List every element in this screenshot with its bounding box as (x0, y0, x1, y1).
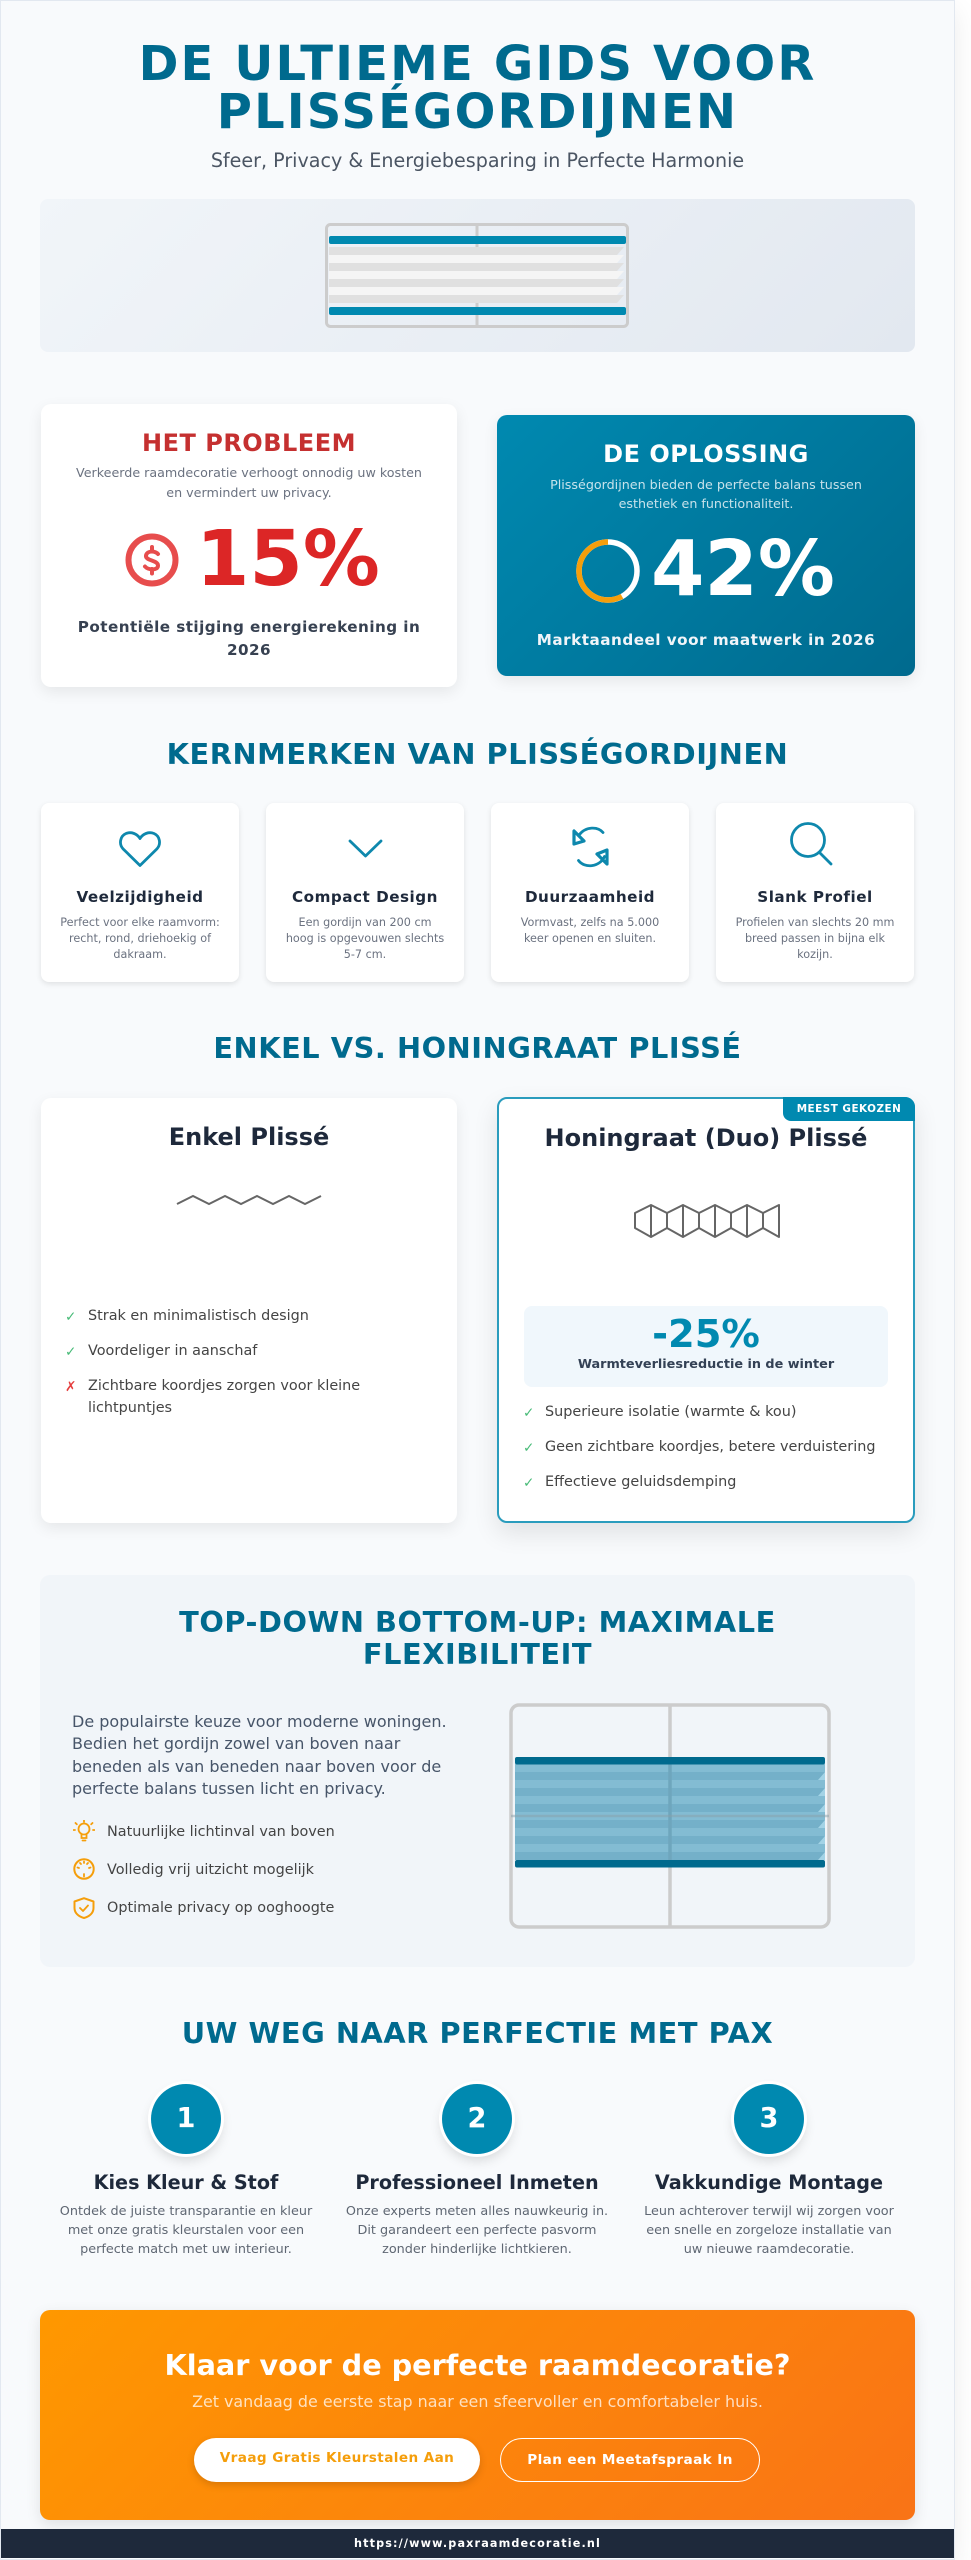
heading (179, 1605, 776, 1671)
button: meetafspraak: Plan een Meetafspraak In (527, 2452, 733, 2468)
panel: top-down bottom-up (40, 1575, 915, 1967)
step 1 (60, 2084, 312, 2257)
description: breed passen in bijna elk (745, 932, 885, 945)
description: Vormvast, zelfs na 5.000 (521, 916, 659, 929)
text: Volledig vrij uitzicht mogelijk (107, 1862, 314, 1878)
heading: enkel vs honingraat: ENKEL VS. HONINGRAAT PLISSÉ (213, 1031, 742, 1065)
text: probleem beschrijving (76, 465, 422, 500)
panel: het probleem (41, 404, 457, 687)
badge: meest gekozen: MEEST GEKOZEN (797, 1103, 901, 1115)
text: beschrijving: De populairste keuze voor moderne woningen. (72, 1712, 447, 1731)
step description: perfecte match met uw interieur. (80, 2242, 292, 2257)
step description: zonder hinderlijke lichtkieren. (382, 2242, 572, 2257)
text: beschrijving: Bedien het gordijn zowel van boven naar (72, 1734, 400, 1753)
description: recht, rond, driehoekig of (69, 932, 211, 945)
list: enkel plissé (65, 1308, 360, 1416)
text: oplossing stat label: Marktaandeel voor maatwerk in 2026 (537, 631, 875, 649)
panel: stappen (60, 2084, 894, 2257)
step description: uw nieuwe raamdecoratie. (684, 2242, 854, 2257)
footer: https://www.paxraamdecoratie.nl (354, 2537, 601, 2550)
description: keer openen en sluiten. (524, 932, 656, 945)
heading: FLEXIBILITEIT (363, 1637, 592, 1671)
text: probleem stat label: Potentiële stijging energierekening in (78, 618, 420, 636)
text: probleem stat label (78, 618, 420, 659)
text: beschrijving: perfecte balans tussen licht en privacy. (72, 1779, 386, 1798)
number circle: 1 (177, 2103, 195, 2134)
cta text: Zet vandaag de eerste stap naar een sfeervoller en comfortabeler huis. (192, 2392, 763, 2411)
description (60, 916, 220, 961)
title: PLISSÉGORDIJNEN (217, 84, 738, 140)
icon: shield check (74, 1897, 94, 1919)
icon: light bulb (73, 1820, 95, 1842)
heading: uw weg naar perfectie: UW WEG NAAR PERFECTIE MET PAX (182, 2016, 773, 2050)
heading: TOP-DOWN BOTTOM-UP: MAXIMALE (179, 1605, 776, 1639)
footer (1, 2529, 954, 2558)
step title: Kies Kleur & Stof (94, 2171, 278, 2194)
icon: pleated blind in window frame (325, 223, 629, 328)
step description: Leun achterover terwijl wij zorgen voor (644, 2204, 894, 2219)
list: voordelen (73, 1820, 335, 1919)
text: oplossing beschrijving: Plisségordijnen bieden de perfecte balans tussen (550, 477, 862, 492)
icon: dollar coin (126, 534, 178, 586)
text: oplossing beschrijving (550, 477, 862, 511)
text: beschrijving (72, 1712, 447, 1798)
icon: sync arrows (572, 826, 609, 868)
text: oplossing beschrijving: esthetiek en functionaliteit. (619, 496, 793, 511)
button: kleurstalen: Vraag Gratis Kleurstalen Aan (220, 2450, 454, 2466)
stat label: Warmteverliesreductie in de winter (578, 1357, 834, 1372)
stat value: -25% (652, 1312, 760, 1357)
step description: een snelle en zorgeloze installatie van (646, 2223, 892, 2238)
list: enkel plissé: ✓ (65, 1344, 76, 1360)
description: dakraam. (113, 948, 167, 961)
title: Compact Design (292, 888, 438, 906)
icon: single pleat wave (176, 1194, 322, 1206)
list: honingraat plissé: Effectieve geluidsdemping (545, 1474, 736, 1490)
badge: meest gekozen (783, 1097, 915, 1121)
icon: honeycomb cells (634, 1204, 780, 1238)
title: DE ULTIEME GIDS VOOR (139, 36, 816, 92)
step description: Ontdek de juiste transparantie en kleur (60, 2204, 312, 2219)
number circle (734, 2084, 804, 2154)
stat: 42%: 42% (651, 525, 835, 614)
text: probleem beschrijving: Verkeerde raamdecoratie verhoogt onnodig uw kosten (76, 465, 422, 480)
list: honingraat plissé: Geen zichtbare koordjes, betere verduistering (545, 1439, 875, 1455)
title: Enkel Plissé (169, 1123, 329, 1151)
list: honingraat plissé: ✓ (523, 1440, 534, 1456)
icon: ring chart 42% (576, 539, 640, 603)
icon: chevron (348, 840, 382, 858)
description (286, 916, 444, 961)
panel: call to action (40, 2310, 915, 2520)
stat: 15%: 15% (196, 515, 380, 604)
icon: top-down bottom-up blind (509, 1703, 831, 1929)
step title: Vakkundige Montage (655, 2171, 883, 2194)
panel: feature duurzaamheid (491, 803, 689, 982)
panel: enkel plissé (41, 1098, 457, 1523)
description (736, 916, 894, 961)
step 2 (346, 2084, 608, 2257)
icon: magnifier (790, 822, 832, 866)
title: Slank Profiel (757, 888, 873, 906)
description: kozijn. (797, 948, 833, 961)
list: enkel plissé: Strak en minimalistisch design (88, 1308, 309, 1324)
description (520, 916, 659, 945)
text: probleem stat label: 2026 (227, 641, 271, 659)
step description: Dit garandeert een perfecte pasvorm (358, 2223, 596, 2238)
list: honingraat plissé (523, 1404, 875, 1491)
panel: feature compact design (266, 803, 464, 982)
text: beschrijving: beneden als van beneden naar boven voor de (72, 1757, 441, 1776)
button: meetafspraak (500, 2438, 760, 2482)
title (139, 36, 816, 140)
description: Perfect voor elke raamvorm: (60, 916, 220, 929)
heading: de oplossing: DE OPLOSSING (603, 440, 809, 468)
number circle: 3 (760, 2103, 778, 2134)
description: Profielen van slechts 20 mm (736, 916, 894, 929)
icon: heart (119, 831, 161, 867)
heading: kernmerken: KERNMERKEN VAN PLISSÉGORDIJNEN (167, 737, 788, 771)
text: Optimale privacy op ooghoogte (107, 1900, 334, 1916)
step description (346, 2204, 608, 2257)
heading: het probleem: HET PROBLEEM (142, 429, 356, 457)
step description (60, 2204, 312, 2257)
panel: hero illustration (40, 199, 915, 352)
description: 5-7 cm. (344, 948, 386, 961)
step description (644, 2204, 894, 2257)
panel: de oplossing (497, 415, 915, 676)
number circle: 2 (468, 2103, 486, 2134)
subtitle: Sfeer, Privacy & Energiebesparing in Perfecte Harmonie (211, 149, 744, 172)
description: Een gordijn van 200 cm (298, 916, 432, 929)
list: enkel plissé: ✓ (65, 1309, 76, 1325)
cta heading: Klaar voor de perfecte raamdecoratie? (164, 2348, 790, 2382)
title: Veelzijdigheid (76, 888, 204, 906)
button: kleurstalen (194, 2438, 480, 2482)
description: hoog is opgevouwen slechts (286, 932, 444, 945)
title: Duurzaamheid (525, 888, 655, 906)
list: enkel plissé: ✗ (65, 1379, 76, 1395)
list: enkel plissé: Voordeliger in aanschaf (88, 1343, 257, 1359)
number circle (151, 2084, 221, 2154)
step description: met onze gratis kleurstalen voor een (68, 2223, 304, 2238)
list: honingraat plissé: Superieure isolatie (warmte & kou) (545, 1404, 796, 1420)
list: honingraat plissé: ✓ (523, 1405, 534, 1421)
number circle (442, 2084, 512, 2154)
list: enkel plissé: Zichtbare koordjes zorgen voor kleine (88, 1378, 360, 1394)
stat box: -25% (524, 1306, 888, 1387)
title: Honingraat (Duo) Plissé (545, 1124, 867, 1152)
panel: feature veelzijdigheid (41, 803, 239, 982)
list: enkel plissé: lichtpuntjes (88, 1400, 172, 1416)
step 3 (644, 2084, 894, 2257)
panel: honingraat plissé (497, 1097, 915, 1523)
step title: Professioneel Inmeten (355, 2171, 599, 2194)
panel: feature slank profiel (716, 803, 914, 982)
text: probleem beschrijving: en vermindert uw privacy. (166, 484, 332, 500)
step description: Onze experts meten alles nauwkeurig in. (346, 2204, 608, 2219)
icon: open view circle (73, 1858, 95, 1880)
text: Natuurlijke lichtinval van boven (107, 1824, 335, 1840)
list: honingraat plissé: ✓ (523, 1475, 534, 1491)
